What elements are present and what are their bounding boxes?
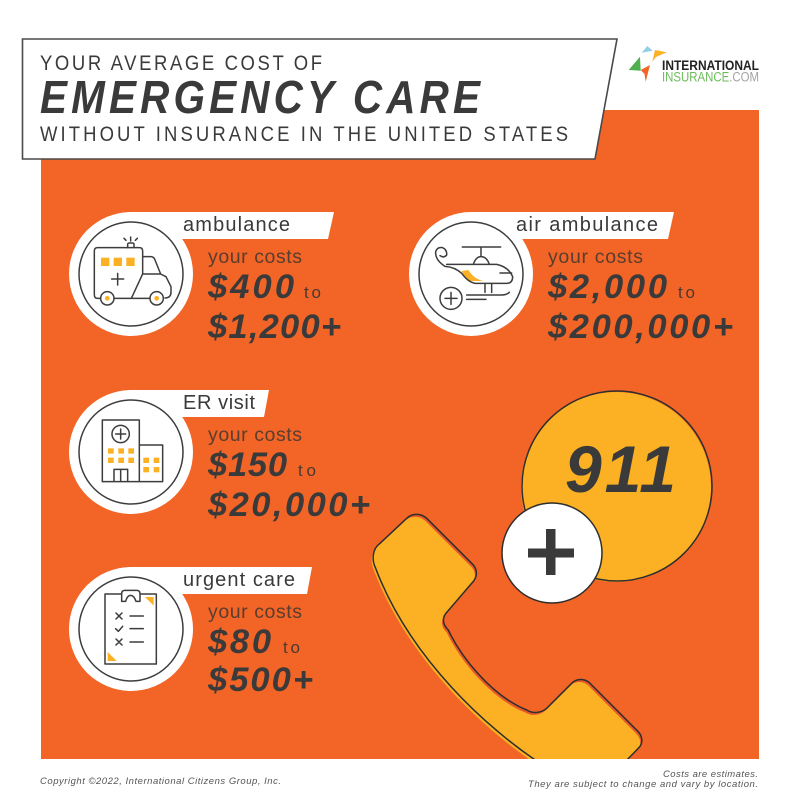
title block: EMERGENCY CARE [40, 73, 481, 124]
icon: telephone handset [372, 514, 642, 764]
text: to: to [298, 461, 316, 480]
label: air ambulance: air ambulance [516, 214, 658, 236]
cost: low urgent care: $80 [207, 623, 271, 661]
title block: YOUR AVERAGE COST OF [40, 52, 322, 75]
icon: hospital [102, 420, 163, 482]
cost: high ER: $20,000+ [207, 486, 370, 524]
badge: 911 circle: 911 [565, 432, 676, 506]
badge: plus circle [502, 503, 602, 603]
title block: WITHOUT INSURANCE IN THE UNITED STATES [40, 123, 568, 146]
footer: disclaimer: Costs are estimates. [663, 769, 758, 780]
panel: orange background [41, 110, 759, 759]
text: to: to [304, 283, 321, 302]
title block [22, 39, 617, 159]
card: ambulance [69, 212, 341, 346]
badge: ER visit circle and tab [69, 390, 269, 514]
icon: clipboard [105, 590, 156, 664]
text: your costs: your costs [548, 246, 643, 268]
text: your costs: your costs [208, 246, 302, 268]
footer: disclaimer: They are subject to change and vary by location. [528, 779, 758, 790]
cost: high ambulance: $1,200+ [207, 308, 341, 346]
footer: copyright: Copyright ©2022, International Citizens Group, Inc. [40, 776, 281, 787]
icon: ambulance [94, 237, 171, 305]
text: your costs: your costs [208, 601, 302, 623]
badge: 911 circle [521, 391, 712, 582]
logo: International Insurance: INSURANCE.COM [662, 70, 759, 84]
badge: air ambulance circle and tab [409, 212, 674, 336]
text: your costs: your costs [208, 424, 302, 446]
label: ambulance: ambulance [183, 214, 290, 236]
logo: International Insurance [629, 46, 759, 84]
footer: disclaimer [528, 769, 758, 790]
text: to: to [283, 638, 300, 657]
label: ER visit: ER visit [183, 392, 255, 414]
label: urgent care: urgent care [183, 569, 295, 591]
text: to: to [678, 283, 695, 302]
cost: high air ambulance: $200,000+ [547, 308, 733, 346]
cost: high urgent care: $500+ [207, 661, 313, 699]
badge: urgent care circle and tab [69, 567, 312, 691]
cost: low air ambulance: $2,000 [547, 268, 667, 306]
card: air ambulance [409, 212, 733, 346]
logo: International Insurance: INTERNATIONAL [662, 58, 759, 73]
cost: low ambulance: $400 [207, 268, 294, 306]
icon: helicopter [436, 247, 513, 309]
card: ER visit [69, 390, 370, 524]
card: urgent care [69, 567, 313, 699]
cost: low ER: $150 [207, 446, 287, 484]
badge: ambulance circle and tab [69, 212, 334, 336]
